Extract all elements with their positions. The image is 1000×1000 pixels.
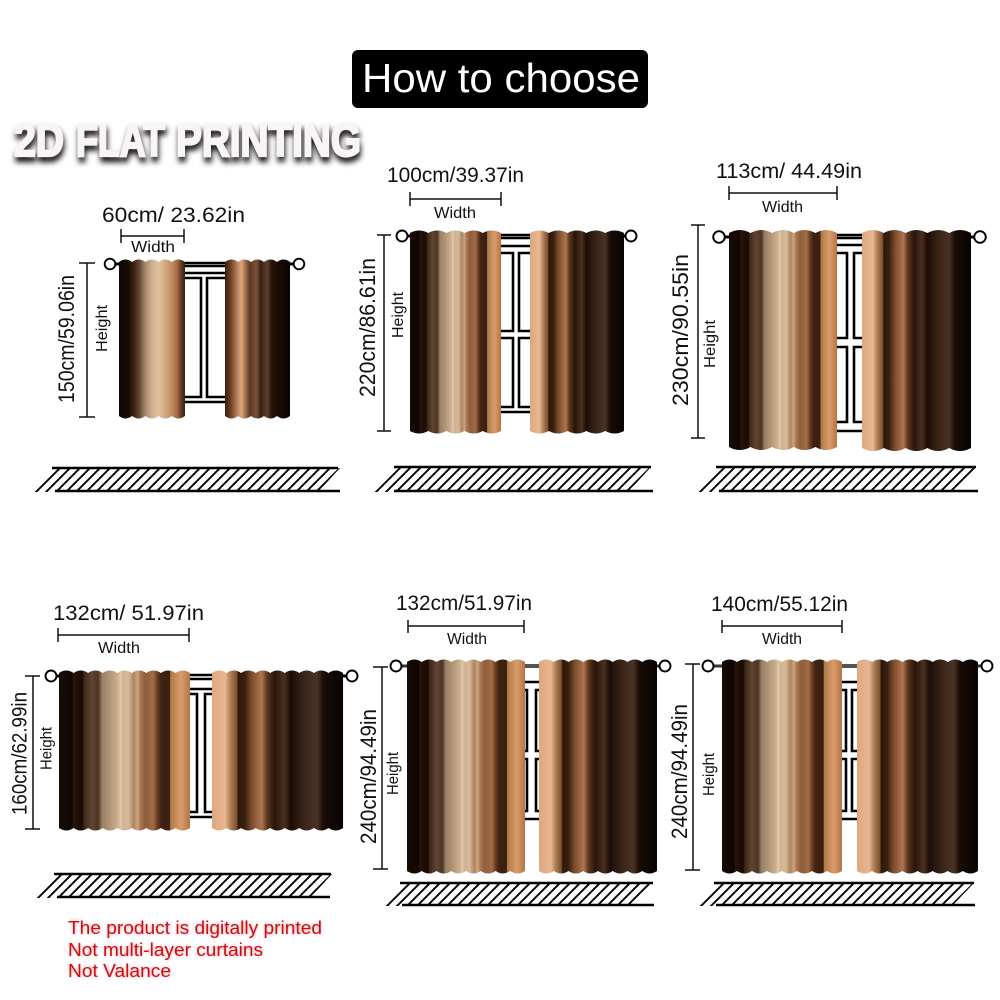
height dimension: Height [702, 319, 719, 368]
height dimension [668, 225, 719, 438]
window frame [842, 682, 857, 819]
window frame [185, 263, 225, 402]
left curtain panel [119, 260, 185, 418]
floor hatch [384, 883, 654, 906]
height dimension [355, 235, 407, 431]
height dimension: 240cm/94.49in [667, 704, 692, 839]
height dimension: Height [701, 752, 718, 796]
width dimension: 60cm/ 23.62in [102, 204, 245, 227]
panel: curtain 140cm x 240cm [667, 593, 992, 906]
heading: 2D flat printing [14, 114, 361, 166]
floor hatch [698, 467, 978, 492]
left curtain panel [59, 670, 190, 830]
height dimension [8, 676, 56, 829]
title: How to choose: How to choose [362, 55, 640, 101]
right curtain panel [212, 670, 343, 830]
height dimension [54, 263, 111, 417]
height dimension: Height [38, 726, 56, 770]
right curtain panel [857, 660, 978, 874]
note: red product disclaimer: The product is digitally printed [68, 918, 322, 938]
floor hatch [36, 874, 332, 898]
note: red product disclaimer [68, 918, 322, 981]
height dimension: Height [390, 291, 407, 338]
curtain rod and rings [390, 660, 670, 672]
floor hatch [374, 467, 653, 492]
height dimension: 240cm/94.49in [356, 709, 381, 844]
width dimension: Width [762, 631, 802, 648]
panel: curtain 132cm x 240cm [356, 592, 670, 906]
heading: 2D flat printing: FLAT [76, 114, 165, 166]
height dimension: 220cm/86.61in [355, 258, 380, 397]
note: red product disclaimer: Not multi-layer curtains [68, 940, 263, 960]
height dimension: 160cm/62.99in [8, 692, 32, 815]
height dimension [356, 667, 402, 869]
panel: curtain 60cm x 150cm [34, 204, 340, 492]
window frame [525, 682, 539, 819]
height dimension: Height [94, 304, 111, 352]
width dimension [102, 204, 245, 256]
width dimension: Width [131, 239, 175, 256]
width dimension [396, 592, 532, 648]
width dimension: 113cm/ 44.49in [716, 160, 862, 183]
right curtain panel [862, 230, 971, 451]
floor hatch [34, 468, 340, 492]
width dimension: Width [434, 205, 476, 222]
left curtain panel [729, 230, 837, 450]
width dimension [53, 602, 204, 657]
width dimension: Width [98, 640, 140, 657]
heading: 2D flat printing: PRINTING [176, 114, 361, 166]
height dimension: Height [385, 751, 402, 795]
curtain rod and rings [702, 660, 992, 672]
right curtain panel [530, 230, 624, 434]
width dimension [716, 160, 862, 216]
left curtain panel [410, 230, 501, 434]
width dimension: Width [762, 199, 803, 216]
floor hatch [698, 883, 975, 906]
window frame [501, 235, 530, 412]
width dimension: 100cm/39.37in [387, 164, 524, 187]
curtain rod and rings [105, 259, 304, 269]
width dimension: Width [447, 631, 487, 648]
height dimension: 230cm/90.55in [668, 254, 693, 406]
width dimension: 132cm/ 51.97in [53, 602, 204, 625]
width dimension: 140cm/55.12in [711, 593, 848, 616]
curtain rod and rings [46, 670, 358, 682]
width dimension [387, 164, 524, 222]
left curtain panel [722, 660, 842, 874]
width dimension [711, 593, 848, 648]
panel: curtain 100cm x 220cm [355, 164, 653, 492]
left curtain panel [407, 660, 525, 874]
right curtain panel [225, 260, 290, 418]
window frame [190, 675, 212, 817]
panel: curtain 113cm x 230cm [668, 160, 986, 492]
height dimension: 150cm/59.06in [54, 275, 79, 403]
heading: 2D flat printing: 2D [14, 114, 64, 166]
curtain rod and rings [396, 230, 636, 242]
curtain rod and rings [713, 231, 986, 243]
right curtain panel [539, 660, 657, 874]
width dimension: 132cm/51.97in [396, 592, 532, 615]
window frame [837, 235, 862, 431]
panel: curtain 132cm x 160cm [8, 602, 358, 898]
height dimension [667, 664, 718, 870]
note: red product disclaimer: Not Valance [68, 961, 171, 981]
